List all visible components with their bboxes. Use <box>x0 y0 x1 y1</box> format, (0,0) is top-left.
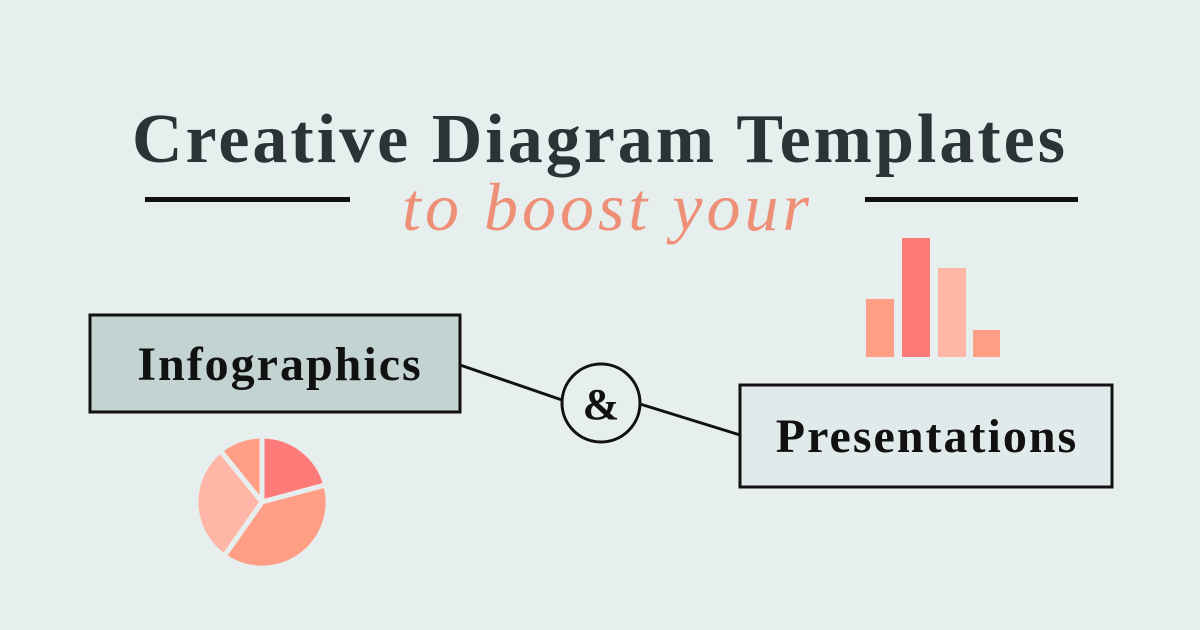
ampersand circle <box>562 364 640 442</box>
bar chart <box>866 238 1000 357</box>
title: Creative Diagram Templates <box>132 101 1068 178</box>
connector lines <box>460 365 740 435</box>
subtitle <box>145 169 1078 245</box>
box: infographics: Infographics <box>137 338 423 391</box>
box: infographics <box>90 315 460 412</box>
subtitle: to boost your <box>402 169 813 245</box>
ampersand circle: & <box>583 380 619 429</box>
box: presentations: Presentations <box>776 410 1078 463</box>
box: presentations <box>740 385 1112 487</box>
pie chart <box>196 436 328 568</box>
